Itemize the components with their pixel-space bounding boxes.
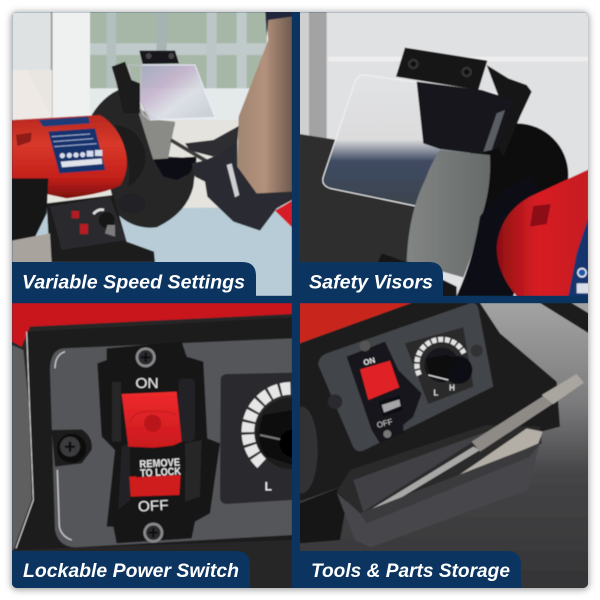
black flange [457,177,542,296]
top bracket [396,48,487,90]
motor blue label [38,117,105,173]
grinder housing [92,85,197,228]
lock tab: TO LOCK [140,466,181,480]
dial panel: H [449,384,455,393]
dark base [378,254,458,296]
knob on housing [118,193,146,213]
storage tray [337,425,542,547]
motor flange [115,125,145,187]
black machine base [47,195,155,263]
panel: tools and parts storage [286,303,590,589]
off label: OFF [376,417,394,430]
panel: variable speed settings [12,12,292,296]
dial panel: L [265,480,272,494]
visor bracket [112,51,179,113]
blue label [568,217,590,296]
red rocker [122,392,182,497]
plate screws [328,341,483,438]
motor slot [16,133,32,146]
wall [299,12,590,296]
grinding wheel [407,150,490,277]
label: tools and parts storage: Tools & Parts Storage [311,560,510,582]
dial panel [405,327,473,404]
adjuster knobs [487,65,532,157]
off label: OFF [138,498,169,515]
tool rest [153,157,197,180]
sleeve [265,12,292,37]
speckled bench surface [299,303,590,589]
label: safety visors: Safety Visors [309,272,433,294]
grinding wheel [138,109,176,160]
drill bit long [362,374,584,517]
control plate [318,303,493,451]
panel: lockable power switch [12,303,292,588]
arm [237,12,292,200]
drill bit short [457,428,543,477]
base casting [299,303,560,502]
left casting [12,345,32,550]
switch housing [97,342,220,543]
on label: ON [362,356,376,367]
dial panel [220,373,328,504]
glove strap [227,163,239,197]
black base plate [15,317,292,550]
tray front [360,443,540,523]
dial ticks [248,388,293,463]
label: variable speed settings [12,262,256,296]
housing [470,122,569,212]
red motor [299,303,412,343]
label: safety visors [299,262,443,296]
bottom screw [143,523,163,543]
visor [128,65,215,120]
label: lockable power switch: Lockable Power Switch [23,560,239,582]
top screw [136,347,156,367]
tool handle [275,201,292,227]
label: lockable power switch [12,551,250,588]
lock tab: REMOVE [139,457,180,471]
gray plate [50,338,292,547]
red rocker [360,361,399,400]
motor slot [530,204,551,227]
window and wall background [12,12,292,296]
label: tools and parts storage [299,551,521,588]
visor [321,74,498,208]
switch housing [347,342,422,443]
left black switch box [12,178,48,241]
motor body [12,115,127,198]
left screw mount [52,429,92,467]
lock tab [131,445,185,480]
red motor band [12,303,292,347]
panel: safety visors [299,12,590,296]
dial panel: L [434,388,439,397]
motor [497,169,589,296]
lock tab [378,395,403,417]
control plate [50,197,126,250]
on label: ON [135,376,159,392]
left casting speck [286,407,318,493]
black visor block [416,81,501,154]
top right bar [540,303,590,334]
label: variable speed settings: Variable Speed Settings [22,272,245,294]
desk [300,134,416,262]
glove [185,126,292,231]
